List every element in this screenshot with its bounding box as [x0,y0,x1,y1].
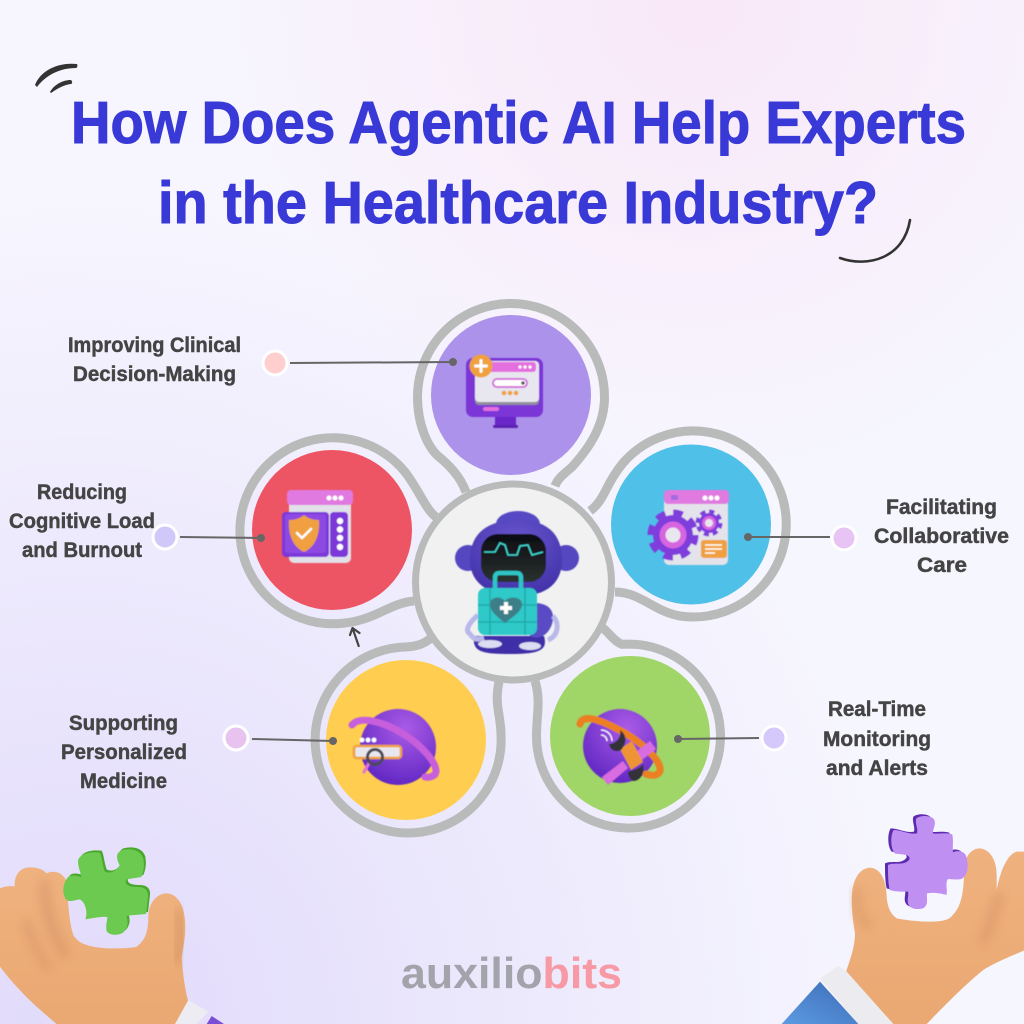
icon: gears window [652,490,729,565]
flower ring outline [240,304,786,833]
title: in the Healthcare Industry? [158,170,878,236]
icon: left hand with green puzzle piece [0,847,224,1024]
callout: Facilitating Collaborative Care: Care [917,554,967,577]
callout: Improving Clinical Decision-Making [68,334,457,386]
panel: right blue circle [611,444,771,604]
panel: bottom left yellow circle [326,660,486,820]
decorative swoosh top left [35,64,77,93]
callout: Real-Time Monitoring and Alerts: Monitoring [823,728,931,751]
panel: top purple circle [431,315,591,475]
title: How Does Agentic AI Help Experts [71,90,966,156]
decorative swoosh bottom right of title [840,220,910,262]
callout: Supporting Personalized Medicine [61,712,337,793]
icon: planet with search bar [352,709,436,785]
callout: Facilitating Collaborative Care: Collaborative [874,525,1009,548]
callout: Facilitating Collaborative Care [744,496,1009,577]
title [71,90,966,236]
callout: Reducing Cognitive Load and Burnout: Reducing [37,481,127,504]
callout: Real-Time Monitoring and Alerts [674,698,931,780]
icon: shield window [282,490,353,563]
central circle [416,484,612,680]
callout: Improving Clinical Decision-Making: Improving Clinical [68,334,241,357]
arrow: small up arrow [350,628,360,646]
robot body and legs [468,603,557,654]
robot head [455,511,579,596]
callout: Reducing Cognitive Load and Burnout: Cognitive Load [9,510,155,533]
callout: Supporting Personalized Medicine: Personalized [61,741,187,764]
callout: Reducing Cognitive Load and Burnout [9,481,265,562]
callout: Facilitating Collaborative Care: Facilitating [886,496,997,519]
icon: medical monitor [466,354,543,428]
logo: auxiliobits [401,949,622,998]
callout: Reducing Cognitive Load and Burnout: and Burnout [22,539,142,562]
callout: Supporting Personalized Medicine: Supporting [69,712,178,735]
medical case [478,573,537,635]
icon: right hand with purple puzzle piece [782,814,1024,1024]
panel: left red circle [252,450,412,610]
icon: planet with satellite [580,709,660,785]
callout: Real-Time Monitoring and Alerts: and Alerts [826,757,928,780]
callout: Real-Time Monitoring and Alerts: Real-Time [828,698,926,721]
panel: bottom right green circle [550,656,710,816]
callout: Supporting Personalized Medicine: Medicine [80,770,167,793]
callout: Improving Clinical Decision-Making: Decision-Making [73,363,236,386]
icon: robot holding medical case [455,511,579,654]
